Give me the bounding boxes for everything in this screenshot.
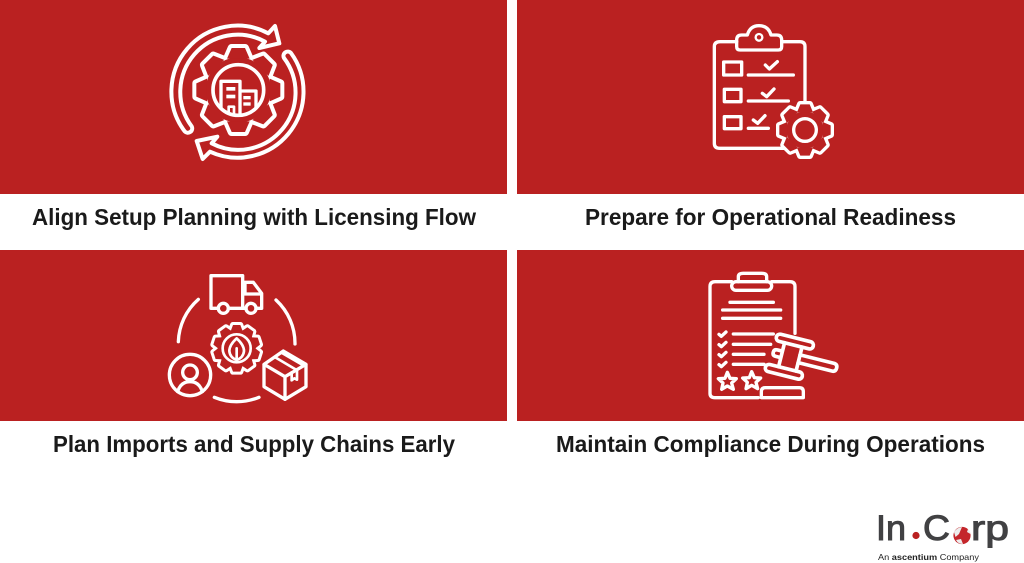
logo wordmark: C (923, 509, 950, 548)
heading: imports and supply chains: Plan Imports and Supply Chains Early (53, 431, 455, 457)
logo wordmark: In (876, 509, 906, 548)
gavel (765, 333, 841, 388)
heading: compliance during operations: Maintain Compliance During Operations (556, 431, 985, 457)
heading: operational readiness: Prepare for Operational Readiness (585, 204, 956, 230)
logo wordmark (876, 509, 1009, 548)
icon: globe (953, 527, 971, 544)
logo wordmark: rp (971, 509, 1009, 548)
panel: align setup planning (0, 0, 507, 230)
red panel background (517, 250, 1024, 421)
icon: checklist clipboard with gear (714, 26, 831, 156)
panel: compliance during operations (517, 250, 1024, 457)
icon: supply chain cycle (169, 276, 306, 402)
icon: gear with building and cycle arrows (171, 26, 304, 159)
heading: align setup planning: Align Setup Planning with Licensing Flow (32, 204, 476, 230)
logo tagline: An ascentium Company (878, 553, 980, 562)
panel: imports and supply chains (0, 250, 507, 457)
red panel background (517, 0, 1024, 194)
red panel background (0, 0, 507, 194)
icon: clipboard with gavel (710, 273, 841, 398)
panel: operational readiness (517, 0, 1024, 230)
red panel background (0, 250, 507, 421)
logo: InCorp (876, 509, 1009, 562)
